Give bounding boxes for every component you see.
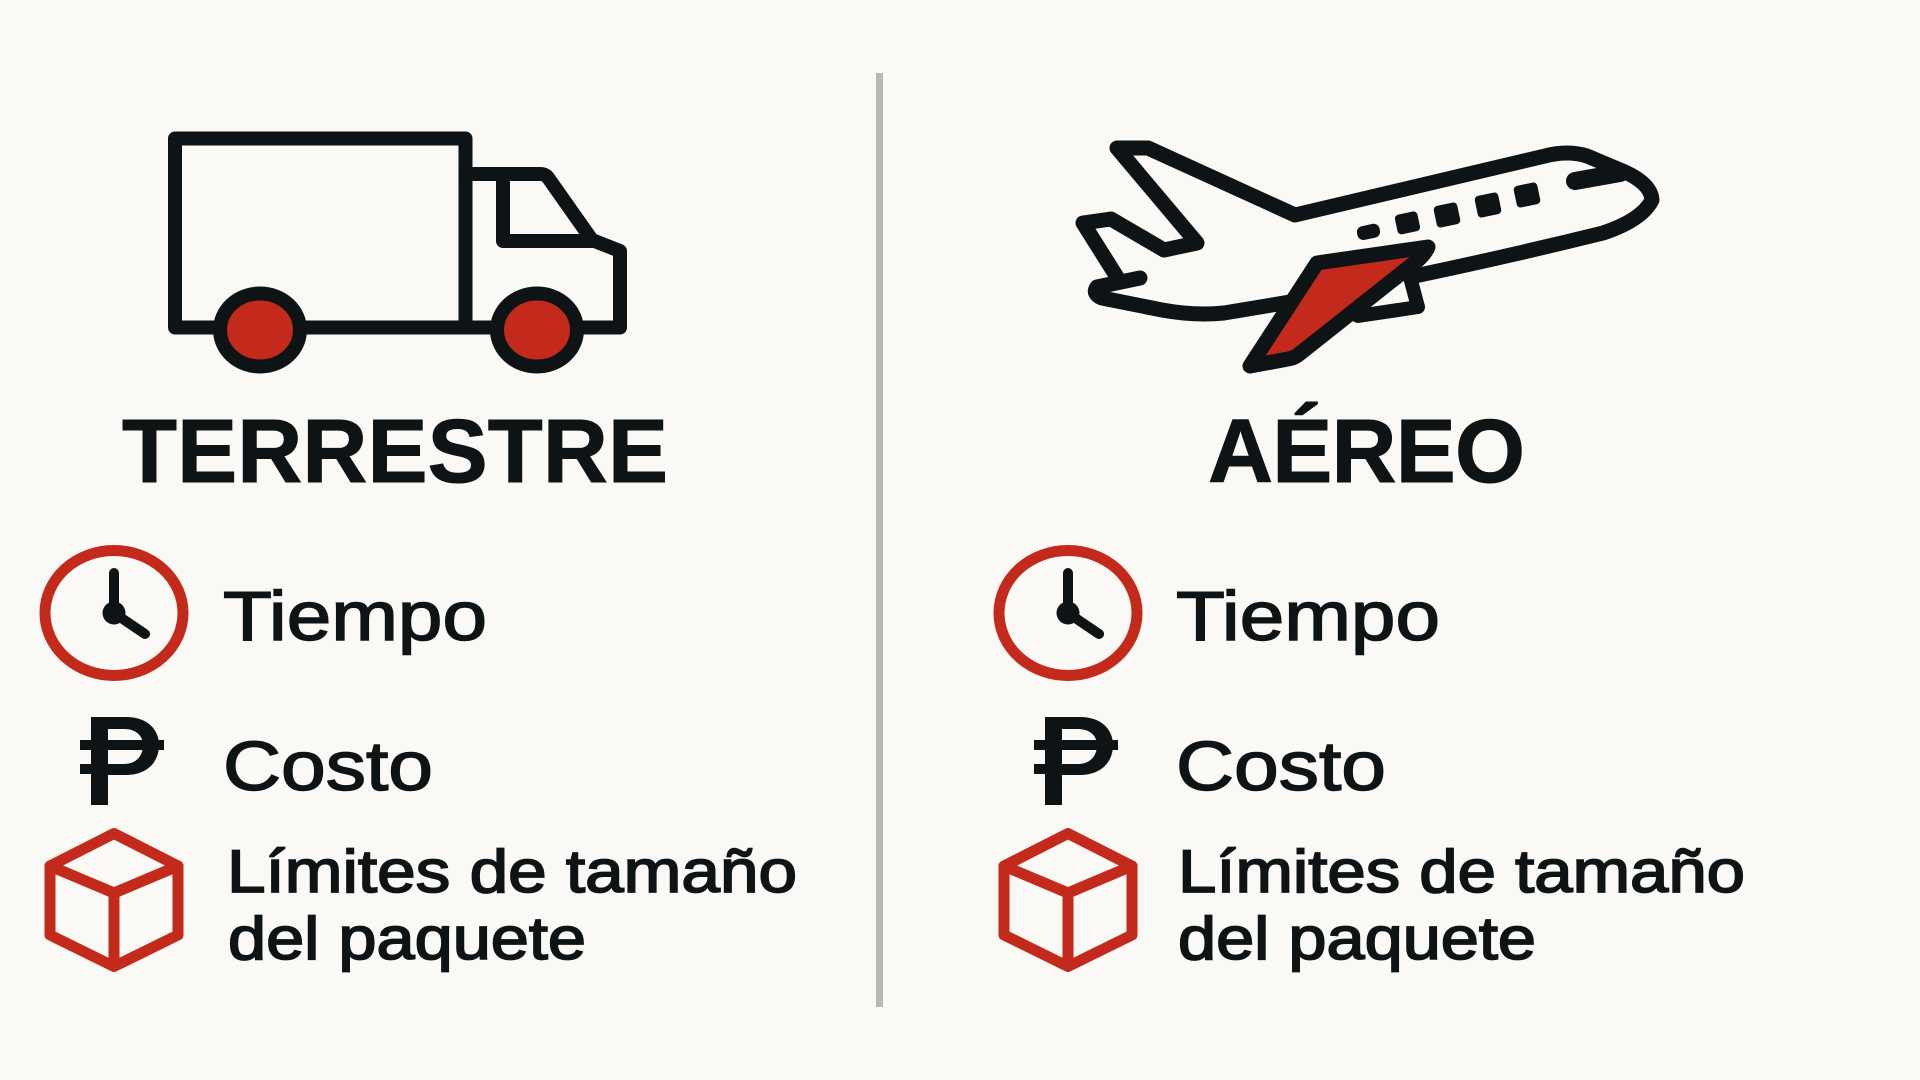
heading: aereo: AÉREO — [1208, 401, 1525, 502]
icon: package box — [1004, 834, 1132, 966]
icon: airplane — [1083, 148, 1652, 366]
row: limites — [50, 834, 797, 972]
label: costo: Costo — [1176, 727, 1386, 805]
label: costo: Costo — [223, 727, 433, 805]
icon: clock — [45, 550, 183, 676]
label: limites: Límites de tamaño — [227, 838, 797, 905]
row: costo — [80, 717, 433, 805]
label: tiempo: Tiempo — [1176, 577, 1440, 655]
label: tiempo: Tiempo — [223, 577, 487, 655]
row: tiempo — [999, 550, 1440, 676]
label: limites: del paquete — [228, 905, 586, 972]
panel: terrestre — [45, 138, 797, 972]
icon: truck — [175, 138, 620, 366]
row: limites — [1004, 834, 1745, 972]
label: limites: del paquete — [1178, 905, 1536, 972]
icon: package box — [50, 834, 178, 966]
panel: aereo — [999, 148, 1745, 972]
heading: terrestre: TERRESTRE — [122, 402, 668, 502]
icon: peso sign — [80, 717, 164, 805]
icon: clock — [999, 550, 1137, 676]
divider — [876, 73, 883, 1007]
row: costo — [1034, 717, 1386, 805]
label: limites: Límites de tamaño — [1178, 838, 1745, 905]
icon: peso sign — [1034, 717, 1118, 805]
row: tiempo — [45, 550, 487, 676]
